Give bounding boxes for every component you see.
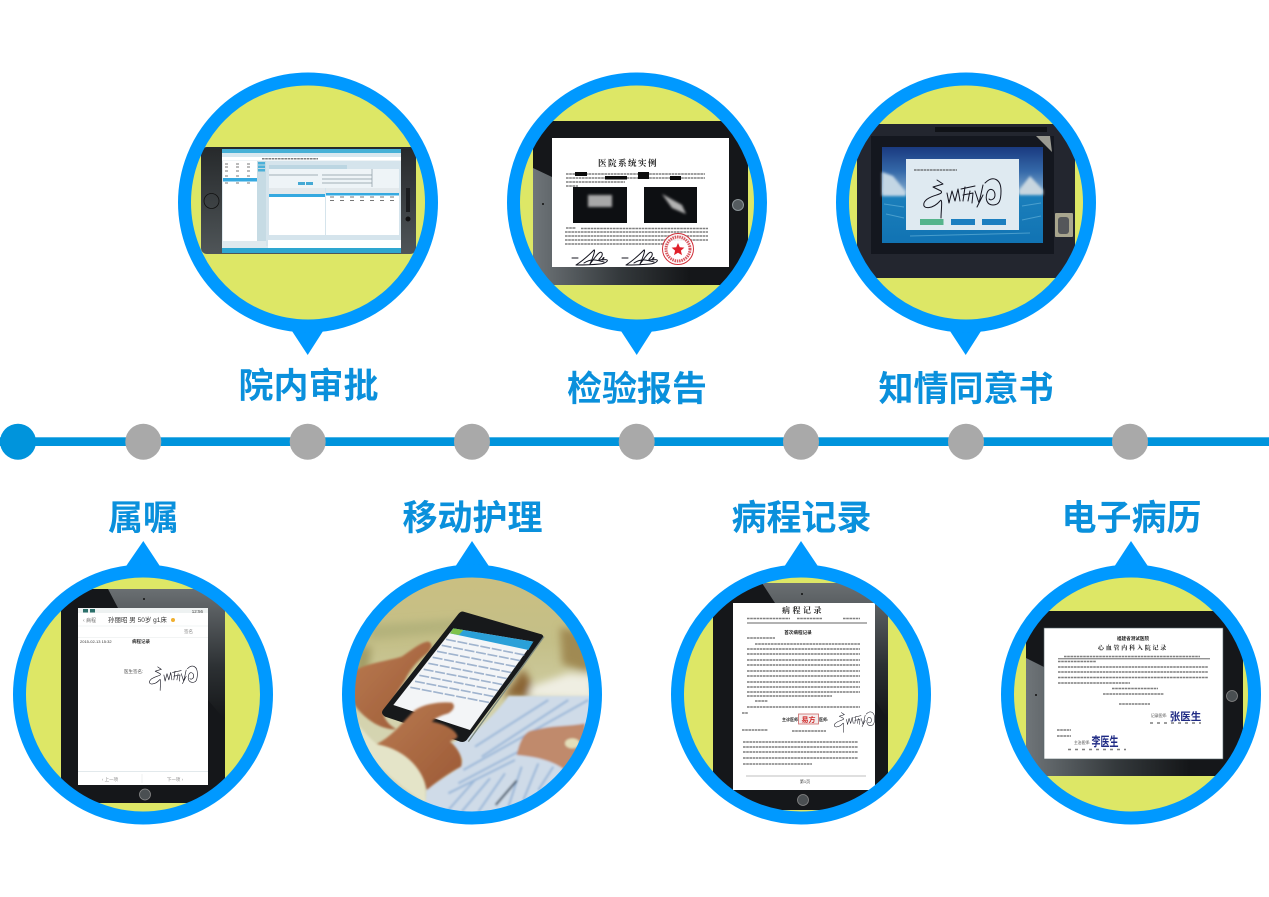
ring	[348, 571, 596, 818]
heading: 知情同意书: 知情同意书	[878, 370, 1054, 409]
doctor signature: 张医生	[1170, 710, 1202, 723]
illustration: tablet with admission record	[1014, 578, 1248, 812]
ring	[514, 79, 760, 326]
illustration: tablet with ultrasound report	[520, 86, 754, 320]
ring	[842, 79, 1090, 326]
timeline	[0, 424, 1269, 460]
illustration: tablet with admission record: 记录医师:	[1151, 713, 1167, 718]
attending signature: 李医生	[1092, 733, 1119, 749]
pin pointer	[1114, 541, 1148, 567]
pin pointer	[290, 328, 325, 355]
panel: 检验报告	[513, 78, 761, 409]
ring	[20, 571, 266, 818]
illustration: tablet with order signature: 下一项 ›	[167, 777, 184, 783]
ring	[184, 79, 432, 326]
illustration: tablet with admission record: 主治医师:	[1074, 740, 1090, 745]
tablet	[382, 612, 544, 742]
illustration: tablet with order signature	[26, 578, 260, 812]
illustration: tablet with progress note: 病程记录	[782, 605, 824, 615]
panel: 电子病历	[1007, 499, 1255, 818]
heading: 移动护理: 移动护理	[402, 499, 543, 538]
pin pointer	[619, 328, 654, 355]
illustration: tablet with progress note: 主诊医师:	[782, 716, 799, 722]
patient shirt	[425, 696, 593, 815]
heading: 电子病历: 电子病历	[1061, 499, 1202, 538]
illustration: signature pad	[849, 86, 1083, 320]
ring	[678, 571, 924, 818]
pin pointer	[126, 541, 160, 567]
panel: 病程记录	[677, 499, 925, 818]
red stamp	[662, 234, 694, 264]
heading: 属嘱: 属嘱	[108, 499, 178, 538]
illustration: tablet with order signature: 孙丽昭 男 50岁 g1床	[108, 615, 167, 624]
illustration: tablet with order signature: 12:56	[192, 609, 203, 614]
illustration: tablet with ultrasound report: 医院系统实例	[598, 158, 658, 168]
red seal	[798, 714, 818, 724]
illustration: tablet with order signature: 病程记录	[132, 638, 150, 645]
red seal: 易方	[802, 715, 816, 724]
illustration: tablet with admission record: 心血管内科入院记录	[1098, 644, 1168, 652]
fingerprint reader	[1055, 213, 1073, 237]
panel: 属嘱	[19, 499, 267, 818]
illustration: tablet with progress note	[684, 578, 918, 812]
illustration: tablet with order signature: ‹ 上一项	[102, 776, 119, 783]
illustration: tablet with order signature: ‹ 病程	[83, 617, 96, 624]
illustration: tablet with progress note: 首次病程记录	[784, 629, 812, 636]
pin pointer	[948, 328, 983, 355]
pin pointer	[455, 541, 490, 567]
timeline start node	[0, 424, 36, 460]
illustration: tablet with order signature: 医生签名:	[124, 668, 143, 675]
heading: 病程记录: 病程记录	[731, 499, 872, 538]
timeline nodes	[125, 424, 1148, 460]
illustration: landscape phone with hospital system	[191, 86, 425, 320]
illustration: nurse hands holding tablet beside patient	[355, 578, 589, 812]
left hand	[353, 642, 431, 729]
illustration: tablet with progress note: 医师:	[819, 716, 828, 722]
sleeve	[359, 725, 426, 802]
heading: 院内审批: 院内审批	[238, 367, 379, 406]
heading: 检验报告: 检验报告	[567, 370, 707, 409]
ring	[1008, 571, 1254, 818]
illustration: tablet with admission record: 福建省测试医院	[1117, 635, 1149, 642]
illustration: tablet with order signature: 签名	[184, 628, 193, 635]
right hand	[377, 702, 462, 790]
panel: 院内审批	[184, 78, 432, 406]
panel: 移动护理	[340, 499, 607, 827]
panel: 知情同意书	[842, 78, 1090, 409]
illustration: tablet with progress note: 第1页	[800, 778, 810, 784]
pin pointer	[784, 541, 818, 567]
illustration: tablet with order signature: 2015-02-13 15:32	[80, 639, 112, 644]
